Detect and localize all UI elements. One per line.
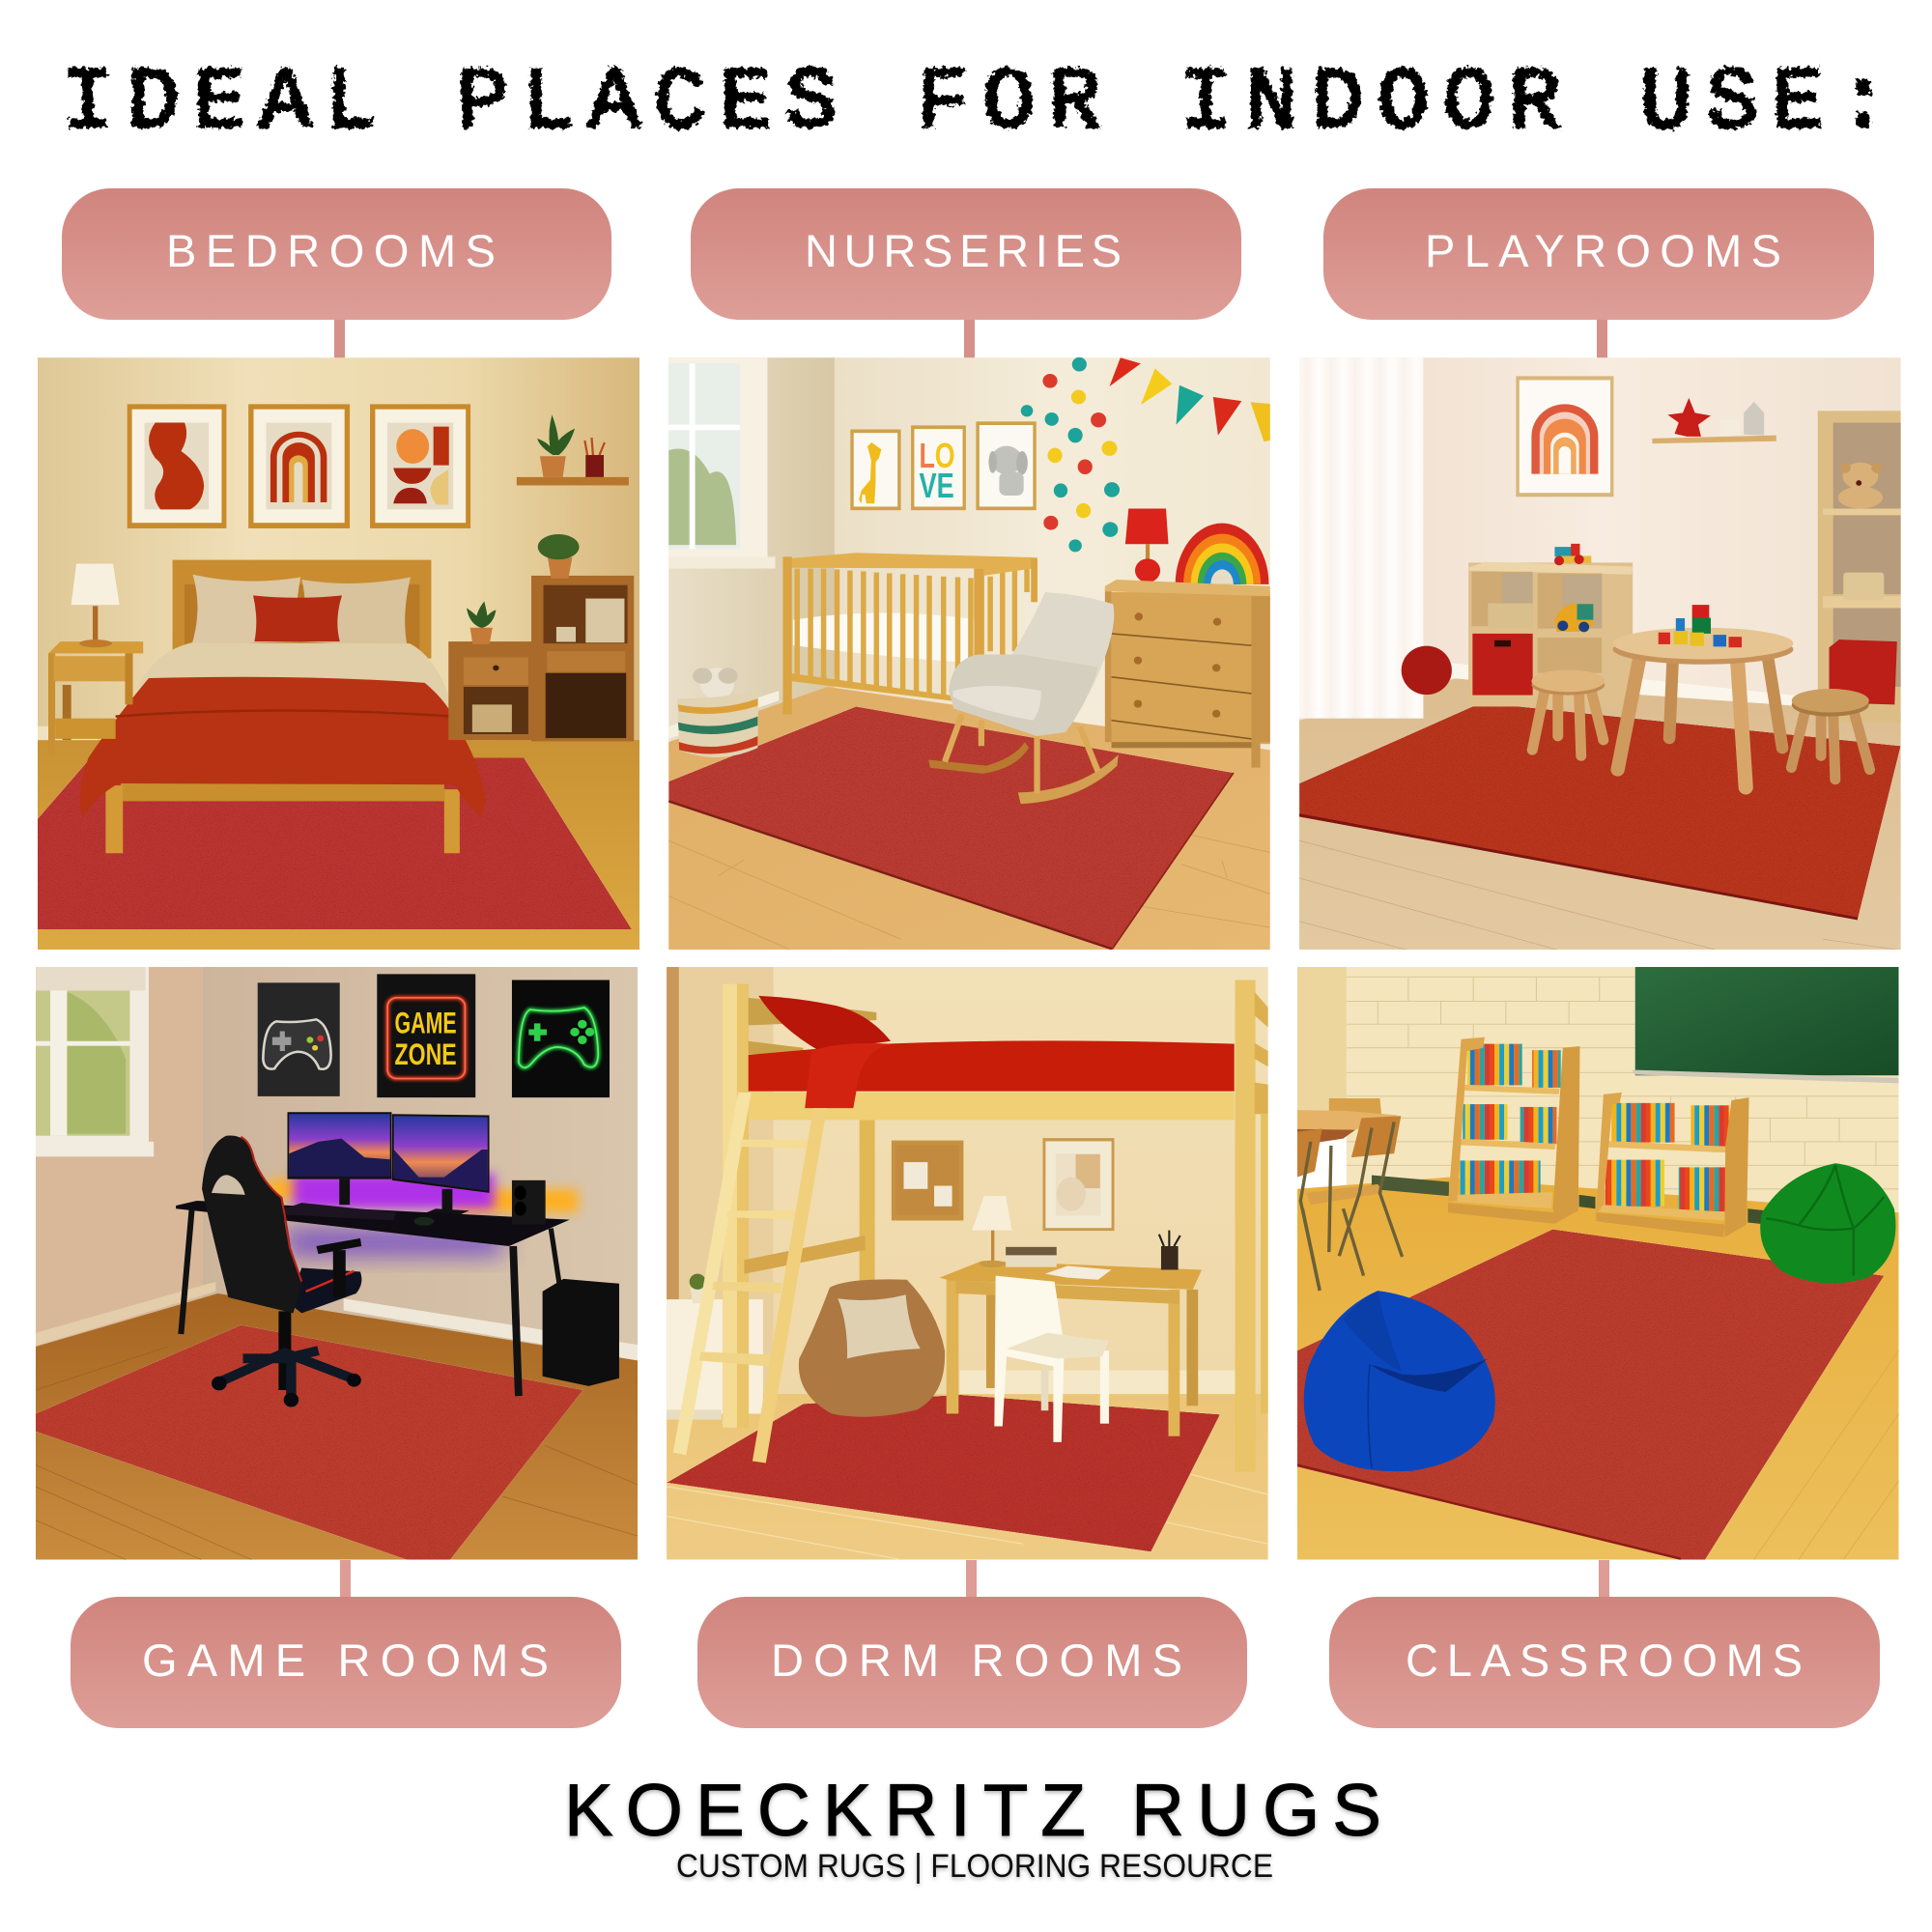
rainbow print [1516, 376, 1613, 497]
poster: game zone [377, 974, 475, 1097]
gaming chair [202, 1136, 361, 1407]
window [668, 357, 775, 569]
desk with lamp and books [940, 1196, 1202, 1436]
label pill: bedrooms [62, 188, 611, 358]
label pill: playrooms [1323, 188, 1874, 358]
chalkboard [1632, 967, 1898, 1083]
curtain [1299, 357, 1423, 719]
label pill: playrooms: PLAYROOMS [1425, 225, 1781, 276]
bean bag [799, 1279, 945, 1417]
tall cabinet with books [531, 534, 634, 741]
rug [667, 1395, 1220, 1551]
poster: game zone: GAME [395, 1006, 457, 1039]
photo panel: nursery [668, 357, 1270, 951]
wall shelf with plant [517, 414, 629, 485]
tall shelf with teddy [1818, 411, 1901, 723]
red lamp and rainbow [1125, 509, 1268, 584]
green bean bag [1760, 1163, 1895, 1284]
ladder [673, 1093, 827, 1463]
brand name: KOECKRITZ RUGS [564, 1770, 1381, 1852]
RGB wall glow [269, 1173, 578, 1256]
framed prints [850, 421, 1037, 510]
photo panel: game room [36, 967, 638, 1559]
dual monitors [287, 1112, 490, 1220]
label pill: dorm rooms [697, 1560, 1247, 1728]
white cabinet and plant [667, 1274, 763, 1420]
photo panel: classroom [1297, 967, 1898, 1559]
wall art trio [128, 404, 470, 528]
label pill: game rooms: GAME ROOMS [142, 1634, 549, 1686]
white chair [994, 1276, 1109, 1442]
framed prints: LO [919, 437, 955, 475]
rug [1299, 702, 1901, 920]
dresser [1105, 580, 1270, 768]
bookcase: right [1596, 1093, 1749, 1237]
right nightstand and plant [448, 601, 534, 740]
wall shelf with star [1652, 398, 1776, 443]
rug [1297, 1229, 1884, 1559]
framed prints: VE [919, 467, 954, 505]
stools [1531, 669, 1870, 780]
rug [38, 757, 632, 929]
rug [668, 706, 1234, 949]
window [36, 967, 154, 1156]
toy truck [1554, 544, 1591, 565]
desk [176, 1180, 570, 1396]
blue bean bag [1304, 1291, 1495, 1471]
poster: game zone: ZONE [395, 1037, 457, 1071]
photo panel: playroom [1299, 357, 1901, 951]
bed [80, 560, 485, 853]
bookcase: left [1448, 1037, 1579, 1224]
label pill: dorm rooms: DORM ROOMS [771, 1634, 1182, 1686]
photo panel: bedroom [38, 357, 639, 951]
left nightstand and lamp [48, 564, 143, 755]
red mattress, pillow and sheet [749, 996, 1235, 1108]
photo panel: dorm room [667, 967, 1268, 1559]
framed art [1042, 1138, 1115, 1231]
label pill: nurseries: NURSERIES [805, 225, 1122, 276]
subwoofer box [543, 1279, 619, 1386]
rug [36, 1325, 583, 1559]
rocking chair [928, 592, 1119, 804]
label pill: classrooms: CLASSROOMS [1406, 1634, 1803, 1686]
red ball [1402, 646, 1452, 695]
child table with blocks [1613, 605, 1793, 787]
label pill: bedrooms: BEDROOMS [166, 225, 496, 276]
poster: neon controller [512, 980, 610, 1097]
label pill: nurseries [691, 188, 1241, 358]
label pill: game rooms [71, 1560, 621, 1728]
wall polka dots [1021, 357, 1120, 552]
cube organizer [1468, 562, 1633, 706]
tagline: CUSTOM RUGS | FLOORING RESOURCE [676, 1848, 1273, 1885]
table and school chairs [1297, 1098, 1403, 1291]
label pill: classrooms [1329, 1560, 1880, 1728]
loft bed frame [723, 980, 1268, 1471]
basket with toy [677, 668, 758, 757]
cork board [892, 1141, 963, 1220]
poster: controller [258, 982, 340, 1096]
title: IDEAL PLACES FOR INDOOR USE: [62, 55, 1889, 154]
bunting [1109, 357, 1270, 441]
crib [782, 553, 1037, 715]
